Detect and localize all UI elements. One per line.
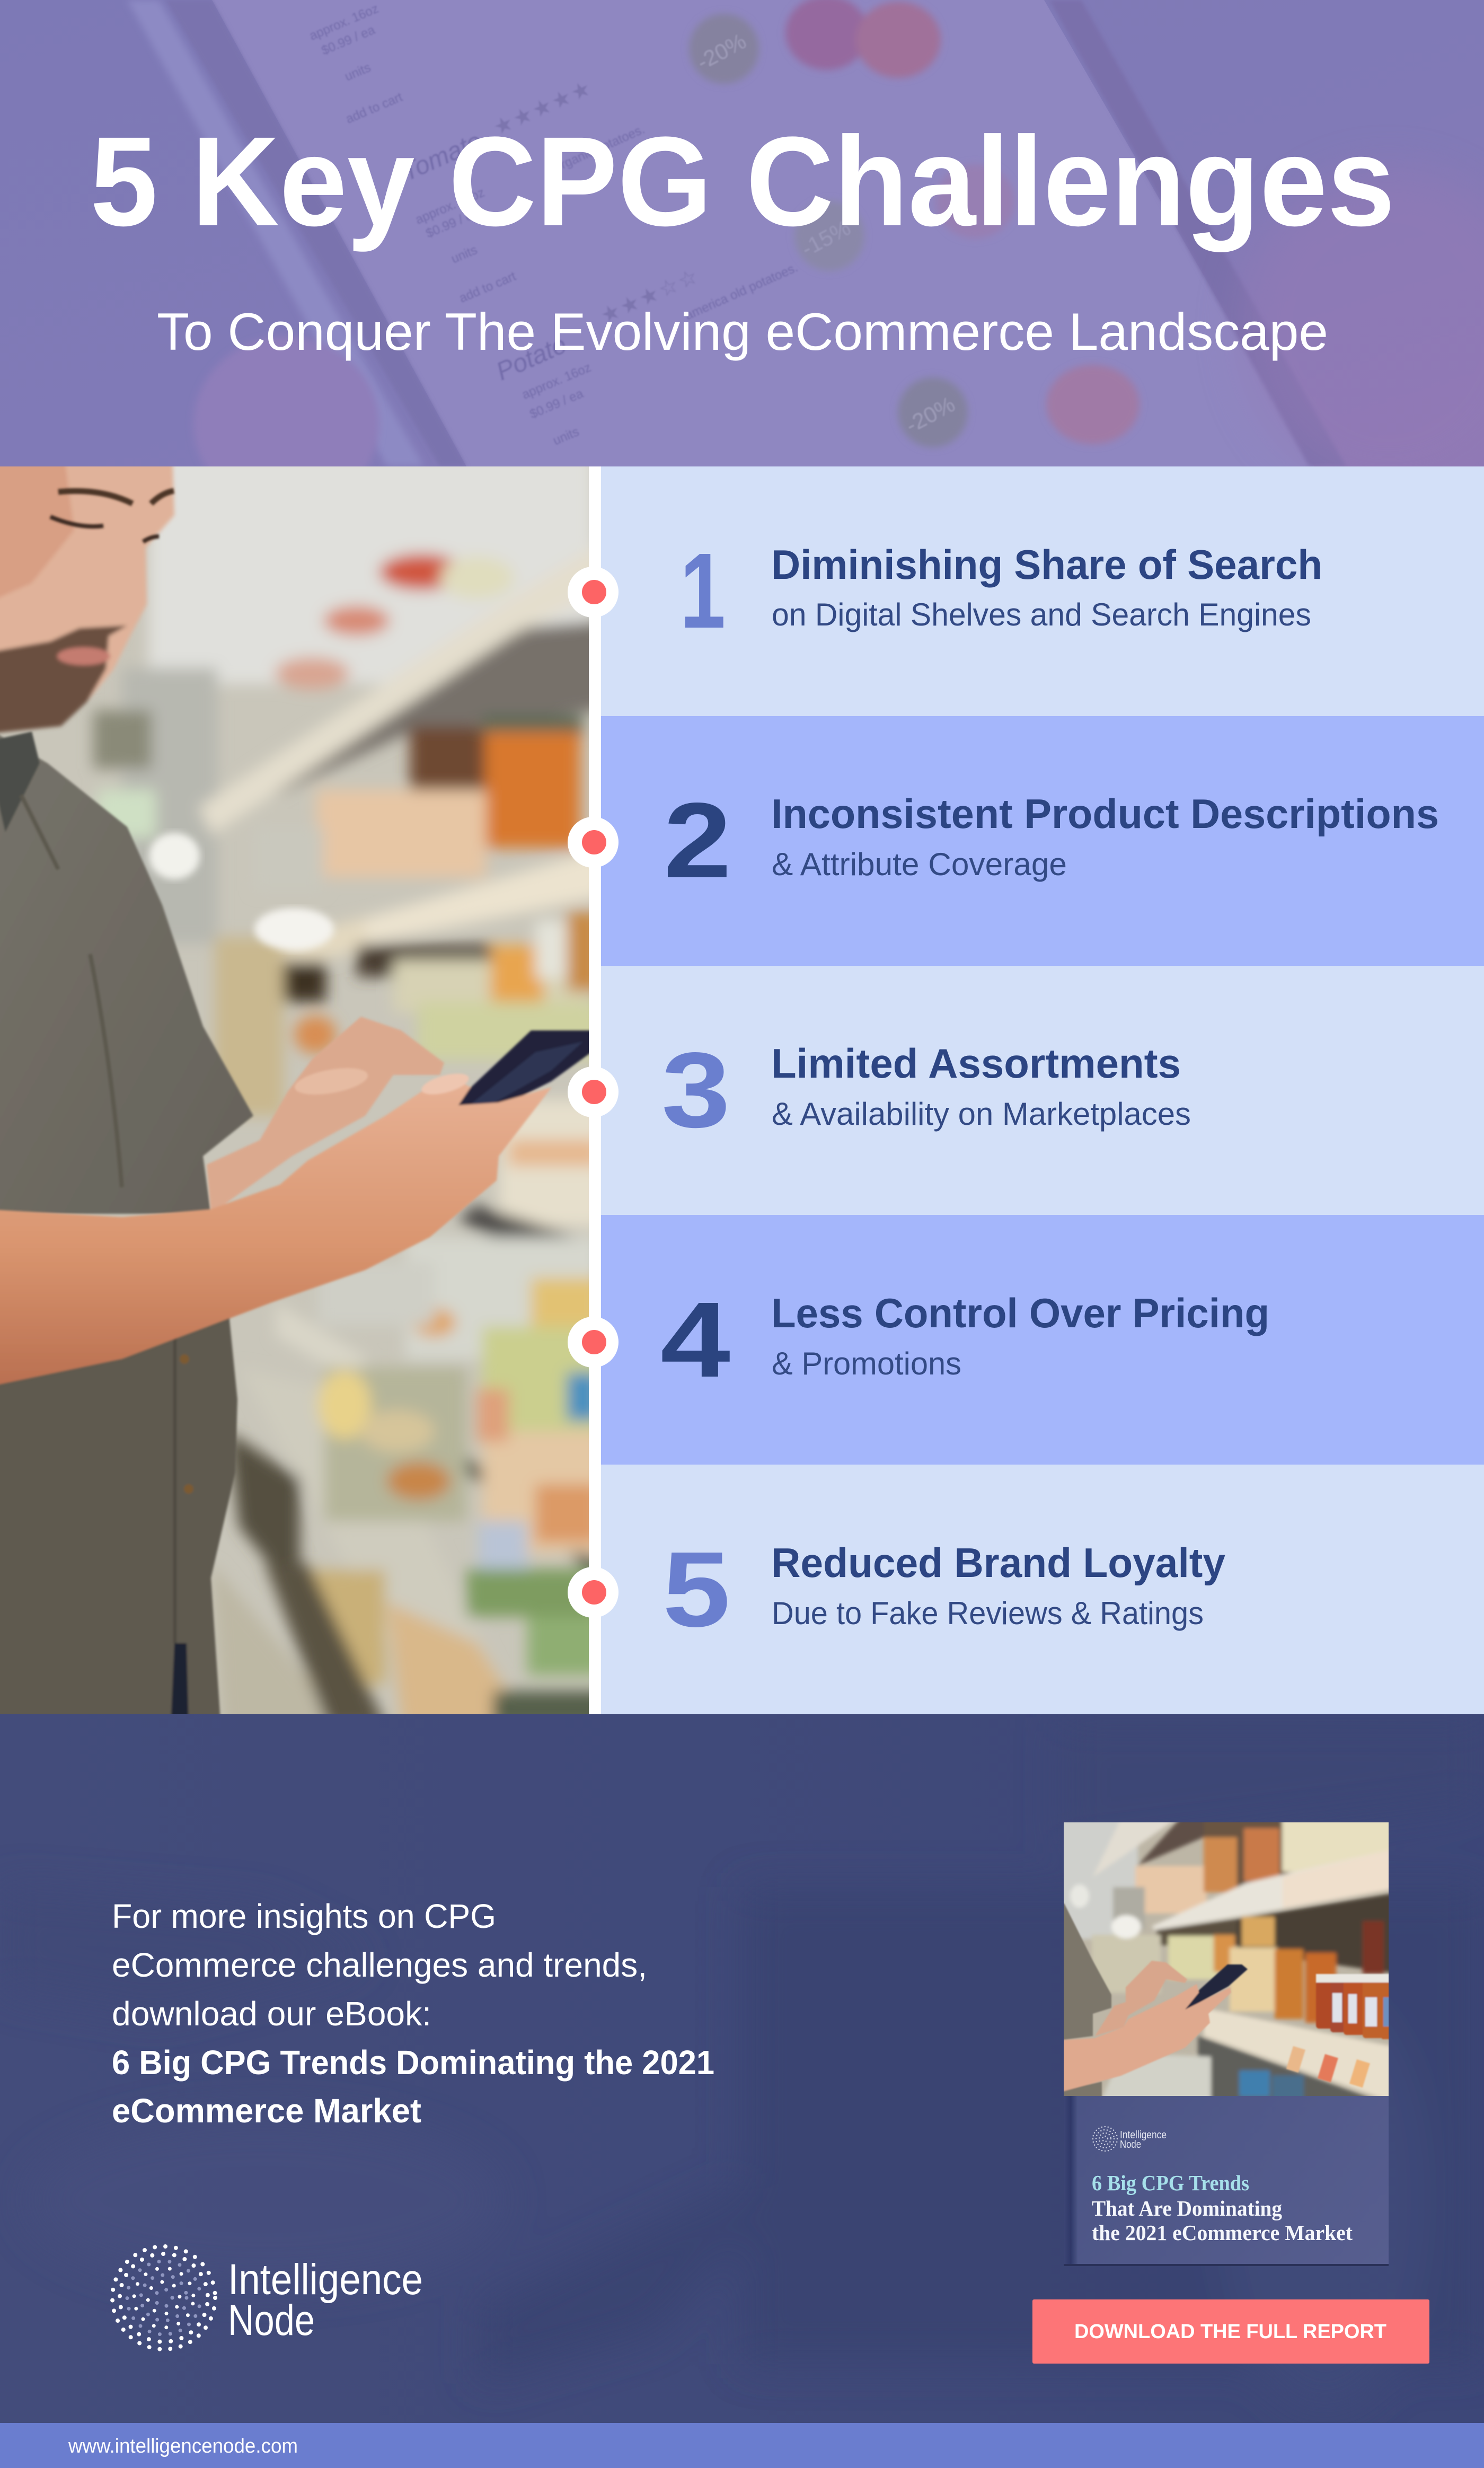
ghost text: blurred product listing: Tomato xyxy=(398,127,486,187)
panel: challenge 1 xyxy=(601,466,1484,716)
footer text block: download our eBook: xyxy=(112,1995,431,2033)
wordmark: Intelligence xyxy=(228,2255,423,2304)
panel: header background with blurred phone screen xyxy=(0,0,1484,512)
footer text block xyxy=(112,1897,714,2130)
man: phone xyxy=(403,1030,599,1156)
heading 4: Less Control Over Pricing xyxy=(771,1290,1269,1336)
timeline markers xyxy=(568,567,619,1618)
logo: Intelligence Node: Node xyxy=(228,2296,315,2344)
man: shirt xyxy=(0,726,253,1214)
cover title xyxy=(1092,2171,1353,2245)
ghost text: blurred product listing: america old potatoes. xyxy=(683,260,800,323)
button: download: DOWNLOAD THE FULL REPORT xyxy=(1074,2321,1386,2343)
footer strip with website: www.intelligencenode.com xyxy=(68,2435,298,2457)
ghost text: blurred product listing: ★★★☆☆ xyxy=(597,263,703,328)
ghost text: blurred product listing: -20% xyxy=(693,28,750,75)
button: download xyxy=(1032,2299,1429,2364)
subtext 1: on Digital Shelves and Search Engines xyxy=(772,597,1311,632)
panel: challenge 2 xyxy=(601,716,1484,966)
ghost text: blurred product listing: $0.99 / ea xyxy=(320,23,377,58)
ghost text: blurred product listing: approx. 16oz xyxy=(520,360,593,402)
ebook cover xyxy=(1055,1813,1399,2266)
panel: challenge 3 xyxy=(601,966,1484,1215)
panel: challenge 5 xyxy=(601,1465,1484,1714)
cover logo xyxy=(1093,2127,1167,2151)
cover spine xyxy=(1064,2096,1077,2266)
title: 5 Key CPG Challenges xyxy=(90,110,1395,252)
number 2: 2 xyxy=(664,780,731,900)
white divider strip xyxy=(589,466,601,1714)
subtext 3: & Availability on Marketplaces xyxy=(772,1096,1191,1132)
heading 5: Reduced Brand Loyalty xyxy=(771,1539,1225,1586)
ghost text: blurred product listing: approx. 16oz xyxy=(413,186,487,227)
number 5: 5 xyxy=(662,1529,730,1649)
man: front arm and hand xyxy=(0,1075,552,1388)
ghost text: blurred product listing: ★★★★★ xyxy=(490,75,596,140)
heading 2: Inconsistent Product Descriptions xyxy=(771,790,1439,837)
subtext 5: Due to Fake Reviews & Ratings xyxy=(772,1596,1204,1631)
man: back hand xyxy=(207,1017,444,1214)
ghost text: blurred product listing: $0.99 / ea xyxy=(424,206,482,241)
cover title: 6 Big CPG Trends xyxy=(1092,2171,1249,2195)
ghost text: blurred product listing: -20% xyxy=(902,391,959,438)
number 1: 1 xyxy=(680,531,726,650)
cover photo: shirt, hands and phone xyxy=(1060,1903,1111,2040)
ghost text: blurred product listing xyxy=(307,2,959,448)
ghost text: blurred product listing: organic potatoes. xyxy=(552,122,647,175)
heading 3: Limited Assortments xyxy=(771,1040,1181,1087)
cover photo xyxy=(1055,1813,1399,2104)
subtext 4: & Promotions xyxy=(772,1346,961,1381)
man xyxy=(0,451,599,1728)
panel: challenge 4 xyxy=(601,1215,1484,1465)
man: face and beard xyxy=(0,451,174,734)
cover bottom edge shadow xyxy=(1064,2264,1389,2266)
ghost text: blurred product listing: units xyxy=(551,425,581,448)
subtext 2: & Attribute Coverage xyxy=(772,847,1067,882)
ghost text: blurred product listing: add to cart xyxy=(344,90,405,127)
footer text block: 6 Big CPG Trends Dominating the 2021 xyxy=(112,2043,714,2082)
photo: shopper using phone in grocery aisle xyxy=(0,451,604,1728)
ghost text: blurred product listing: $0.99 / ea xyxy=(528,386,586,421)
ghost text: blurred product listing: -15% xyxy=(797,215,855,261)
heading 1: Diminishing Share of Search xyxy=(771,541,1322,588)
subtitle: To Conquer The Evolving eCommerce Landscape xyxy=(157,302,1328,361)
logo: Intelligence Node xyxy=(112,2246,423,2349)
cover logo: Node xyxy=(1120,2139,1141,2150)
cover logo: Intelligence xyxy=(1120,2129,1167,2141)
cover title: the 2021 eCommerce Market xyxy=(1092,2220,1353,2245)
ghost text: blurred product listing: units xyxy=(449,243,480,266)
ghost text: blurred product listing: units xyxy=(342,60,373,84)
footer text block: eCommerce challenges and trends, xyxy=(112,1946,647,1984)
ghost text: blurred product listing: add to cart xyxy=(457,269,518,306)
ghost text: blurred product listing: Potato xyxy=(492,330,571,386)
number 3: 3 xyxy=(661,1030,730,1150)
ghost text: blurred product listing: approx. 16oz xyxy=(307,2,381,43)
icon: dotted sphere xyxy=(112,2246,215,2349)
panel: footer background with blurred hand xyxy=(0,1714,1484,2423)
footer text block: For more insights on CPG xyxy=(112,1897,496,1935)
footer strip with website xyxy=(0,2423,1484,2468)
footer text block: eCommerce Market xyxy=(112,2092,421,2130)
number 4: 4 xyxy=(660,1280,730,1399)
cover title: That Are Dominating xyxy=(1092,2196,1282,2220)
